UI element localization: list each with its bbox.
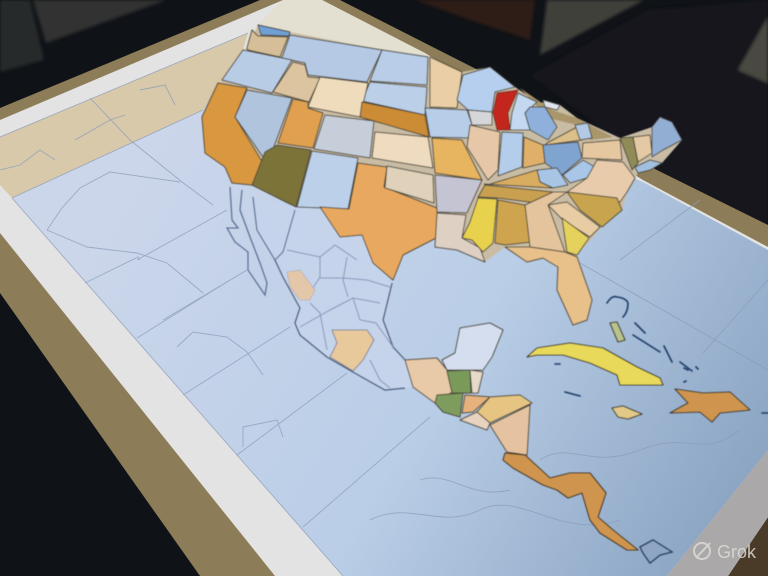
north carolina xyxy=(567,192,622,227)
washington xyxy=(247,30,288,57)
watermark: Grok xyxy=(694,542,757,562)
maine xyxy=(652,117,682,157)
andros xyxy=(610,322,625,342)
dark brown frame corner, bottom right xyxy=(728,517,768,576)
southern mexico tan xyxy=(405,358,452,403)
upper tan state xyxy=(545,127,582,145)
eastern states xyxy=(457,67,682,325)
small blue state xyxy=(575,123,592,140)
lake michigan in red xyxy=(493,90,518,130)
bahamas small islands xyxy=(555,297,768,413)
mexico interior borders xyxy=(287,245,393,388)
iowa xyxy=(425,108,472,138)
cuba xyxy=(527,343,663,385)
new england xyxy=(635,160,662,173)
warm white margin, top xyxy=(248,0,430,56)
nicaragua xyxy=(490,405,530,455)
gray panel, top left xyxy=(33,0,166,43)
montana xyxy=(282,35,382,82)
mexico tan state north xyxy=(287,270,315,300)
lake, mid blue xyxy=(525,107,557,140)
indiana xyxy=(498,132,523,176)
tennessee xyxy=(478,185,553,203)
yucatan xyxy=(442,323,503,370)
idaho xyxy=(273,62,320,102)
nebraska xyxy=(360,102,429,137)
south carolina xyxy=(548,202,600,237)
yellow georgia coast xyxy=(562,218,589,255)
arkansas xyxy=(435,175,482,213)
baja california and sonora coast lines xyxy=(227,187,295,295)
mexico coastline xyxy=(275,260,405,390)
wyoming xyxy=(308,77,368,117)
honduras west xyxy=(462,395,490,413)
texas xyxy=(320,163,438,280)
caribbean islands xyxy=(527,322,750,422)
belize xyxy=(470,370,483,393)
ohio blue xyxy=(543,142,582,175)
kansas xyxy=(372,132,433,168)
illinois xyxy=(467,125,500,180)
south dakota xyxy=(362,82,427,115)
left dark panel xyxy=(0,0,44,72)
shaded margin, bottom right xyxy=(667,450,768,576)
oregon xyxy=(222,50,292,93)
virginia xyxy=(567,160,635,202)
new york xyxy=(633,135,652,162)
blue island shape at isthmus end xyxy=(640,540,672,563)
minnesota xyxy=(430,57,462,108)
beige land panel, upper left xyxy=(0,33,248,198)
western states xyxy=(202,25,485,280)
light blue west oval xyxy=(537,168,568,188)
nevada xyxy=(235,90,292,157)
georgia xyxy=(525,192,567,252)
honduras east xyxy=(477,395,532,423)
north dakota xyxy=(370,50,428,85)
el salvador xyxy=(460,412,490,430)
utah xyxy=(278,99,323,148)
olive strip state xyxy=(620,137,638,170)
guatemala lower green xyxy=(435,393,463,417)
arizona xyxy=(252,145,311,207)
kentucky xyxy=(484,170,553,188)
mexico tan state south xyxy=(330,330,374,371)
california xyxy=(202,83,263,185)
pennsylvania xyxy=(582,140,622,160)
jamaica xyxy=(612,406,642,419)
background furniture xyxy=(0,0,768,225)
michigan light blue xyxy=(510,93,537,130)
icon: grok logo xyxy=(694,543,710,559)
louisiana xyxy=(435,213,485,262)
colorado xyxy=(314,115,374,158)
dark right wall xyxy=(530,0,768,225)
tan land behind the great lakes xyxy=(520,88,613,140)
hispaniola xyxy=(670,389,750,422)
central america xyxy=(405,323,532,455)
alabama xyxy=(495,200,531,245)
guatemala upper green xyxy=(447,370,471,393)
gray panel, right xyxy=(738,17,768,83)
new mexico xyxy=(297,151,358,209)
brown cabinet xyxy=(415,0,535,40)
wisconsin xyxy=(457,67,515,112)
watermark text: Grok xyxy=(717,542,757,562)
blue tip, washington xyxy=(258,25,290,36)
ohio-west xyxy=(523,137,545,168)
pale state below wisconsin xyxy=(468,110,492,125)
mississippi xyxy=(462,198,497,252)
costa rica and panama xyxy=(503,453,638,550)
florida xyxy=(505,247,592,325)
mexico mainland xyxy=(253,197,413,390)
missouri xyxy=(432,138,482,180)
oklahoma xyxy=(385,166,434,203)
gray panel, top centre xyxy=(540,0,644,55)
light blue east oval xyxy=(563,160,595,183)
united states backing land xyxy=(202,25,682,325)
pale island xyxy=(543,100,560,110)
